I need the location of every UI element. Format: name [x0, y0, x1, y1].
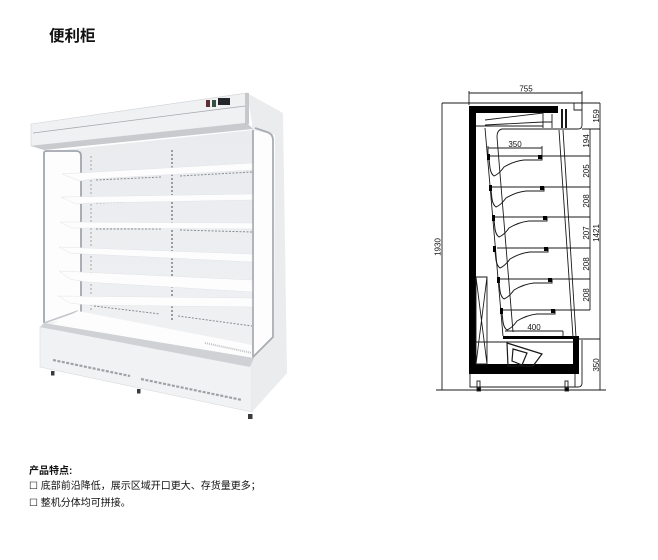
display floor — [47, 311, 252, 361]
features heading: 产品特点: — [29, 466, 72, 477]
dimension labels: 208 — [582, 288, 591, 302]
dimension labels: 208 — [582, 257, 591, 271]
feature 1: ☐ 底部前沿降低，展示区域开口更大、存货量更多； — [29, 481, 261, 492]
feet — [51, 371, 252, 419]
dimension labels: 159 — [592, 109, 601, 123]
dimension labels: 207 — [582, 226, 591, 240]
inner back walls — [476, 128, 576, 342]
dimension labels: 755 — [519, 84, 533, 94]
dimension labels: 194 — [582, 134, 591, 148]
cabinet black walls — [469, 106, 579, 374]
base and feet — [470, 340, 582, 391]
cabinet side panel — [247, 93, 287, 412]
dimension labels: 1421 — [592, 224, 601, 242]
shelf 5 — [497, 277, 552, 299]
shelves — [58, 163, 252, 307]
shelf 6 — [500, 308, 555, 330]
dimension labels: 350 — [592, 358, 601, 372]
dimension labels: 350 — [508, 140, 522, 149]
dimension labels: 400 — [527, 323, 541, 332]
dimension labels — [434, 84, 601, 372]
shelf 2 — [489, 185, 544, 207]
display interior — [44, 128, 275, 357]
shelf rear strips — [94, 172, 252, 326]
shelf 1 — [487, 154, 542, 176]
canopy section — [476, 103, 582, 137]
shelf 3 — [492, 215, 547, 237]
shelf 4 — [493, 246, 548, 268]
canopy — [31, 93, 253, 150]
shelf lines to dimension — [488, 156, 590, 310]
dimension labels: 208 — [582, 194, 591, 208]
feature 2: ☐ 整机分体均可拼接。 — [29, 498, 131, 509]
title: 便利柜 — [49, 28, 96, 44]
dimension labels: 1930 — [434, 238, 442, 256]
dimension labels: 205 — [582, 164, 591, 178]
dimension lines — [436, 91, 606, 390]
product features text — [29, 465, 261, 509]
technical section drawing — [434, 84, 606, 391]
shelves and brackets — [487, 154, 590, 330]
control switches — [206, 98, 230, 107]
base panel — [40, 323, 287, 412]
compressor box — [476, 277, 542, 366]
